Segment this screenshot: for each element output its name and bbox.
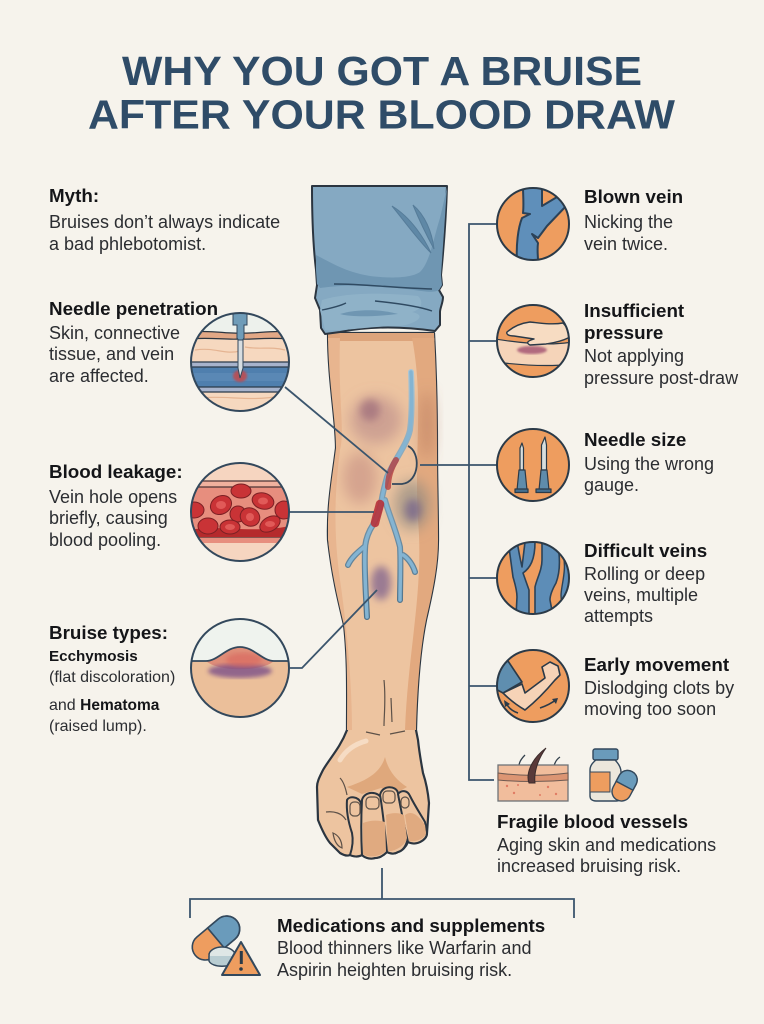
arm and hand — [317, 333, 440, 859]
right: difficult veins text: attempts — [584, 606, 653, 626]
medications and supplements text: Medications and supplements — [277, 915, 545, 936]
right: early movement text: Dislodging clots by — [584, 678, 734, 698]
right: blown vein text: vein twice. — [584, 234, 668, 254]
left: myth: Myth: — [49, 185, 99, 206]
left: blood leakage: Vein hole opens — [49, 487, 177, 507]
right: insufficient pressure text: pressure — [584, 322, 663, 343]
left: myth: a bad phlebotomist. — [49, 234, 206, 254]
left: bruise types: (flat discoloration) — [49, 669, 175, 686]
right: medication bottle icon — [590, 749, 640, 804]
medications and supplements text: Aspirin heighten bruising risk. — [277, 960, 512, 980]
right: insufficient pressure text — [584, 300, 739, 388]
left: needle penetration: Needle penetration — [49, 298, 218, 319]
right: insufficient pressure text: Not applying — [584, 346, 684, 366]
right: early movement text: Early movement — [584, 654, 730, 675]
right: difficult veins icon — [495, 540, 572, 616]
bruises on arm — [343, 391, 434, 530]
right: skin icon — [498, 748, 568, 801]
left: bruise types: Bruise types: — [49, 622, 168, 643]
right: difficult veins text: Difficult veins — [584, 540, 707, 561]
veins — [348, 372, 415, 617]
right: fragile blood vessels text: Aging skin and medications — [497, 835, 716, 855]
right: blown vein text: Blown vein — [584, 186, 683, 207]
icon: needle penetration — [190, 312, 290, 412]
right: insufficient pressure text: Insufficient — [584, 300, 685, 321]
icon: blood leakage — [184, 462, 293, 562]
right: early movement text — [584, 654, 734, 719]
right: fragile blood vessels text — [497, 811, 716, 876]
right: blown vein text — [584, 186, 683, 254]
right: needle size text: gauge. — [584, 475, 639, 495]
icon: bruise types — [190, 618, 290, 718]
left: blood leakage — [49, 461, 183, 550]
medications and supplements text: Blood thinners like Warfarin and — [277, 938, 531, 958]
illustration: arm with sleeve and fist — [312, 186, 447, 859]
right: early movement icon — [496, 649, 570, 723]
medications and supplements text — [277, 915, 545, 980]
title — [88, 48, 675, 138]
left: bruise types: (raised lump). — [49, 718, 147, 735]
fingernails and creases — [326, 680, 409, 848]
right: fragile blood vessels text: increased bruising risk. — [497, 856, 681, 876]
right: insufficient pressure text: pressure post-draw — [584, 368, 739, 388]
right: needle size text — [584, 429, 714, 495]
left: myth — [49, 185, 280, 254]
left: blood leakage: Blood leakage: — [49, 461, 183, 482]
left: needle penetration: tissue, and vein — [49, 344, 174, 364]
left: blood leakage: briefly, causing — [49, 508, 168, 528]
left: needle penetration: Skin, connective — [49, 323, 180, 343]
left: bruise types: and Hematoma — [49, 697, 160, 714]
left: bruise types — [49, 622, 175, 735]
right: difficult veins text: veins, multiple — [584, 585, 698, 605]
right: needle size icon — [497, 429, 569, 501]
left: bruise types: Ecchymosis — [49, 648, 138, 665]
title: WHY YOU GOT A BRUISE — [122, 48, 642, 94]
right: fragile blood vessels text: Fragile blood vessels — [497, 811, 688, 832]
left: blood leakage: blood pooling. — [49, 530, 161, 550]
sleeve — [312, 186, 447, 334]
right: blown vein icon — [495, 186, 571, 262]
hand shading — [347, 757, 407, 794]
right: difficult veins text — [584, 540, 707, 626]
right: needle size text: Using the wrong — [584, 454, 714, 474]
right: insufficient pressure icon — [495, 303, 572, 379]
left: myth: Bruises don’t always indicate — [49, 212, 280, 232]
zoom semicircle on vein — [392, 446, 417, 484]
right: early movement text: moving too soon — [584, 699, 716, 719]
fingers — [347, 797, 362, 856]
title: AFTER YOUR BLOOD DRAW — [88, 92, 675, 138]
left: needle penetration: are affected. — [49, 366, 149, 386]
right: needle size text: Needle size — [584, 429, 686, 450]
right: blown vein text: Nicking the — [584, 212, 673, 232]
right: difficult veins text: Rolling or deep — [584, 564, 705, 584]
icon: pills and warning — [187, 911, 260, 975]
connector lines — [190, 224, 574, 918]
left: needle penetration — [49, 298, 218, 386]
